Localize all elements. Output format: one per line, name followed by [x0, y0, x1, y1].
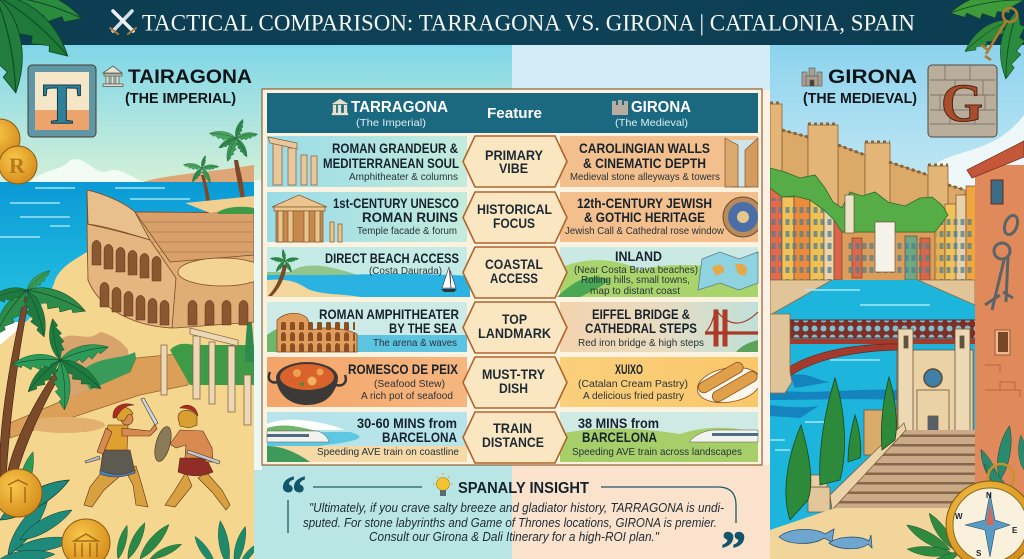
left foreground: palms, gladiators and coins — [0, 119, 260, 559]
icon: compass: E — [1012, 526, 1018, 535]
table header bar: Feature — [487, 105, 542, 122]
tile: mosaic T — [28, 65, 96, 137]
gladiator: right — [152, 405, 230, 510]
icon: temple left heading — [103, 66, 123, 86]
icon: crossed swords — [110, 11, 136, 34]
icon: seafood stew pot — [269, 362, 346, 405]
row: coastal access: COASTAL — [485, 256, 543, 272]
row: must-try dish: (Catalan Cream Pastry) — [578, 378, 688, 390]
row: coastal access: (Costa Daurada) — [369, 265, 442, 277]
row: train distance: Speeding AVE train across landscapes — [572, 446, 742, 458]
callout: Spanaly insight: SPANALY INSIGHT — [458, 480, 589, 497]
tile: stone G — [928, 65, 997, 137]
palm: big — [0, 267, 89, 480]
ruined columns — [161, 328, 251, 425]
row: coastal access: ACCESS — [490, 270, 538, 286]
icon: compass: S — [976, 549, 982, 558]
icon: sailboat — [441, 267, 457, 292]
icon: small colosseum — [277, 313, 357, 352]
row: historical focus: Jewish Call & Cathedral rose window — [565, 225, 724, 237]
top right leaves and brass key — [948, 0, 1024, 81]
row: coastal access: DIRECT BEACH ACCESS — [325, 250, 459, 266]
icon: beach palm — [268, 249, 299, 296]
bottom left leaves — [0, 450, 75, 559]
colourful houses — [770, 186, 976, 290]
icon: lightbulb — [433, 473, 453, 496]
quote text: Consult our Girona & Dali Itinerary for a high-ROI plan." — [369, 529, 660, 544]
table header bar: (The Medieval) — [615, 117, 688, 129]
icon: gold coins: R — [9, 153, 26, 178]
row: train distance: DISTANCE — [482, 434, 544, 450]
icon: rose window — [723, 197, 763, 237]
row: historical focus: & GOTHIC HERITAGE — [584, 209, 705, 225]
row: train distance: 30-60 MINS from — [357, 415, 457, 431]
icon: roman temple — [272, 195, 342, 242]
stairs — [808, 423, 975, 512]
comparison table panel — [262, 89, 763, 465]
row: top landmark: BY THE SEA — [389, 320, 457, 336]
row: historical focus — [267, 192, 763, 243]
quote text: "Ultimately, if you crave salty breeze and gladiator history, TARRAGONA is undi- — [309, 500, 725, 515]
city walls — [770, 103, 965, 236]
icon: castle right heading — [802, 68, 822, 86]
icon: AVE train left — [267, 431, 329, 442]
row: top landmark: EIFFEL BRIDGE & — [592, 306, 690, 322]
cypress trees — [786, 377, 896, 520]
icon: folded map — [698, 252, 758, 290]
icon: AVE train right — [690, 430, 758, 442]
row: train distance: TRAIN — [493, 420, 532, 436]
insight background — [254, 90, 770, 559]
icon: gold coins — [0, 119, 110, 559]
row: top landmark: Red iron bridge & high steps — [578, 337, 704, 349]
red iron bridge — [770, 314, 977, 393]
amphitheater — [87, 190, 266, 328]
row: historical focus: HISTORICAL — [477, 201, 552, 217]
row: top landmark: The arena & waves — [373, 337, 457, 349]
row: coastal access: Rolling hills, small towns, — [581, 274, 690, 286]
row: primary vibe: MEDITERRANEAN SOUL — [323, 155, 459, 171]
row: must-try dish: XUIXO — [615, 361, 643, 377]
palm: second — [8, 317, 110, 470]
row: historical focus: Temple facade & forum — [357, 225, 457, 237]
palm: small tree — [183, 155, 219, 213]
row: must-try dish: A delicious fried pastry — [583, 390, 685, 402]
icon: stone alley — [725, 138, 758, 187]
table header bar — [267, 93, 758, 133]
icon: compass: W — [955, 512, 963, 521]
icon: fish — [779, 529, 872, 549]
row: primary vibe: CAROLINGIAN WALLS — [579, 140, 710, 156]
icon: temple — [332, 99, 348, 115]
icon: compass — [946, 464, 1024, 559]
quote text: sputed. For stone labyrinths and Game of Thrones locations, GIRONA is premier. — [303, 515, 717, 530]
row: primary vibe: VIBE — [499, 160, 528, 176]
row: top landmark: ROMAN AMPHITHEATER — [319, 306, 459, 322]
quote text — [303, 500, 725, 544]
bottom middle leaves — [114, 520, 260, 559]
row: primary vibe: Medieval stone alleyways & towers — [570, 171, 720, 183]
heading: Girona label: (THE MEDIEVAL) — [803, 90, 917, 107]
row: historical focus: 12th-CENTURY JEWISH — [577, 195, 712, 211]
row: top landmark: CATHEDRAL STEPS — [585, 320, 697, 336]
table header bar: GIRONA — [631, 99, 691, 116]
green hillside with bell tower — [770, 168, 948, 272]
row: must-try dish: (Seafood Stew) — [374, 378, 445, 390]
row: must-try dish: DISH — [499, 380, 528, 396]
header band — [0, 0, 1024, 45]
callout: Spanaly insight — [281, 465, 746, 559]
row: must-try dish: ROMESCO DE PEIX — [348, 361, 459, 377]
heading: Girona label: GIRONA — [828, 67, 917, 88]
row: coastal access: map to distant coast — [590, 285, 680, 297]
icon: castle — [612, 100, 628, 115]
teal leaves — [976, 425, 1024, 498]
heading: Tarragona label: (THE IMPERIAL) — [125, 90, 236, 107]
row: train distance: 38 MINS from — [578, 415, 659, 431]
heading: Girona label — [803, 67, 917, 107]
heading: Tarragona label: TAIRAGONA — [128, 67, 252, 88]
palm: right tree — [209, 118, 258, 212]
cathedral — [864, 329, 973, 455]
row: train distance: BARCELONA — [382, 429, 457, 445]
table header bar: TARRAGONA — [351, 99, 448, 116]
row: primary vibe: & CINEMATIC DEPTH — [583, 155, 706, 171]
title: TACTICAL COMPARISON: TARRAGONA VS. GIRONA | CATALONIA, SPAIN — [142, 10, 915, 36]
icon: xuixo pastries — [696, 362, 758, 404]
row: historical focus: FOCUS — [493, 215, 535, 231]
row: top landmark — [267, 302, 758, 353]
row: train distance: BARCELONA — [582, 429, 657, 445]
row: historical focus: 1st-CENTURY UNESCO — [333, 195, 459, 211]
icon: red bridge — [705, 310, 758, 352]
row: train distance: Speeding AVE train on coastline — [317, 446, 459, 458]
tile: stone G: G — [941, 73, 983, 133]
row: primary vibe: Amphitheater & columns — [349, 171, 458, 183]
left scene: Tarragona coast and amphitheater — [0, 45, 512, 559]
tile: mosaic T: T — [43, 71, 81, 136]
icon: iron key — [985, 214, 1020, 310]
row: must-try dish: A rich pot of seafood — [361, 390, 453, 402]
row: coastal access — [267, 247, 758, 298]
top left palm fronds — [0, 0, 86, 96]
row: historical focus: ROMAN RUINS — [362, 209, 458, 225]
orange building — [967, 141, 1024, 510]
icon: opening quote: “ — [281, 465, 306, 521]
row: primary vibe: PRIMARY — [485, 147, 544, 163]
icon: roman columns — [268, 137, 317, 185]
row: top landmark: LANDMARK — [478, 325, 551, 341]
table header bar: (The Imperial) — [356, 117, 426, 129]
heading: Tarragona label — [125, 67, 252, 107]
icon: compass: N — [986, 491, 992, 500]
row: coastal access: INLAND — [615, 248, 662, 264]
row: primary vibe — [267, 136, 758, 187]
right scene: Girona walls, town, river and cathedral — [512, 45, 1024, 559]
palm leaves bottom right — [904, 510, 963, 559]
row: train distance — [267, 412, 758, 463]
row: coastal access: (Near Costa Brava beaches) — [574, 264, 698, 276]
row: must-try dish — [267, 357, 763, 408]
row: top landmark: TOP — [502, 311, 527, 327]
gladiator: left — [84, 398, 158, 507]
row: primary vibe: ROMAN GRANDEUR & — [332, 140, 458, 156]
row: must-try dish: MUST-TRY — [482, 366, 546, 382]
